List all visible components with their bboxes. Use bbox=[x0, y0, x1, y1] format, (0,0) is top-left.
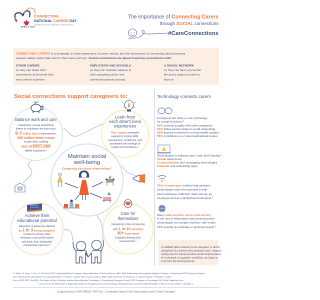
text: social media stats bbox=[157, 116, 219, 138]
header title bbox=[128, 14, 219, 37]
logo: CONNECTING bbox=[34, 14, 59, 18]
column: other carers: each other's expertise. bbox=[16, 78, 46, 82]
text: social media stats: 6 bbox=[183, 121, 184, 123]
circle: achieve educational potential: educational potential bbox=[17, 218, 57, 223]
circle: achieve educational potential: Achieve their bbox=[25, 213, 50, 218]
text: balance technology: Calendar and scheduling apps bbox=[157, 164, 198, 168]
text: assistive technologies: 76% of employees believe that assistive bbox=[157, 184, 211, 188]
text: social media stats: 65% connect socially with other caregivers bbox=[157, 124, 213, 128]
circle: learn from lived experiences: caregivers' coping skills, bbox=[111, 134, 139, 138]
circle: balance work and care: 256 million fewer hours bbox=[17, 136, 55, 140]
figure: two people holding hands bbox=[73, 240, 103, 263]
text: older workers: 9 bbox=[215, 226, 216, 228]
circle: learn from lived experiences bbox=[102, 110, 148, 158]
panel: CARER note: caring role for someone who needs help because bbox=[161, 252, 222, 256]
icon: lightbulb bbox=[122, 98, 136, 112]
text: older workers bbox=[157, 213, 216, 229]
panel: campaign intro bbox=[13, 48, 219, 85]
references: Learn more on the NCW 2023. Is Supporting Caregivers through Research and Technology. http://agewell-nce.ca/archives/2023 Read More in Research and Caregiver Challenge 2. bbox=[39, 282, 194, 286]
circle: maintain social well-being: Maintain social bbox=[68, 154, 106, 160]
circle: balance work and care: Balance work and care bbox=[15, 117, 58, 122]
heading: technology: Technology connects carers bbox=[157, 94, 212, 99]
circle: balance work and care: 1 bbox=[46, 150, 47, 152]
circle: balance work and care: losses to employers are enormous: bbox=[16, 126, 56, 130]
column: a social network: lean on. bbox=[164, 78, 175, 82]
column: other carers: so they can share their bbox=[16, 68, 46, 72]
circle: maintain social well-being: well-being bbox=[73, 160, 100, 166]
text: older workers: technologies as younger workers, with nearly bbox=[157, 220, 216, 224]
circle: achieve educational potential: and lower than anticipated bbox=[22, 239, 53, 243]
divider bbox=[13, 286, 219, 288]
circle: care for themselves: Care for bbox=[121, 211, 136, 216]
text: social media stats: 61% follow social media or social networking bbox=[157, 127, 216, 131]
text: balance technology bbox=[157, 154, 222, 168]
header title: The importance of Connecting Carers bbox=[128, 14, 219, 20]
figure: left person bbox=[73, 241, 88, 263]
column: a social network: so they can have a personal bbox=[164, 68, 201, 72]
text: social media stats: 53% contributes to or view inspirational stories bbox=[157, 134, 218, 138]
header title: #CareConnections bbox=[168, 31, 218, 37]
circle: balance work and care: Collectively, annual productivity bbox=[18, 123, 55, 127]
column: employers and schools bbox=[90, 64, 132, 82]
column: other carers: experiences and benefit from bbox=[16, 72, 54, 76]
figure: bottom right group bbox=[102, 192, 112, 202]
circle: learn from lived experiences: competence, confidence, and bbox=[108, 138, 142, 142]
text: assistive technologies bbox=[157, 184, 213, 200]
references: Fast, et 1999 2017, Vol. 63(5). The Origins of Care & Families, and the Role of Assistive Technology. 4. Caring Family Caregiver. Growth 2023. Computers in Technology 2022, Work Productivity Care. bbox=[13, 279, 184, 282]
panel: CARER note: of a physical or cognitive condition, an injury or bbox=[161, 256, 218, 260]
icon: piggy bank bbox=[31, 102, 43, 113]
icon: laptop bbox=[157, 145, 171, 153]
figure: right person bbox=[88, 240, 103, 263]
circle: balance work and care: skilled employees. bbox=[25, 150, 46, 152]
text: social media stats: for social/ functions: bbox=[157, 120, 183, 124]
text: assistive technologies: employee and as a family/friend caregiver. bbox=[157, 196, 212, 200]
circle: learn from lived experiences: each other's lived bbox=[109, 119, 142, 124]
header title: through SOCIAL connections bbox=[160, 21, 219, 26]
logo: APRIL 6, 2023 bbox=[21, 26, 36, 28]
circle: achieve educational potential bbox=[11, 203, 63, 255]
circle: achieve educational potential: educational outcomes. bbox=[24, 244, 49, 247]
circle: care for themselves bbox=[103, 204, 153, 254]
text: balance technology: Communication and messaging technologies bbox=[157, 160, 218, 164]
circle: learn from lived experiences: 2 bbox=[138, 146, 139, 148]
column: a social network: life and a support system to bbox=[164, 72, 200, 76]
text: older workers: Many older workers are as well-versed bbox=[157, 213, 211, 217]
references: Social Determinants and Systems in Caregiving Network. 2. Statistics Canada. 2022 Caring Canadians Matter 2023 and Social Connections in Caregiver Program. 3. Harding et al 2023. bbox=[13, 276, 172, 278]
heading: social connections: Social connections support caregivers to: bbox=[14, 94, 128, 100]
text: older workers: in the use of information and communication bbox=[157, 216, 215, 220]
circle: achieve educational potential: resulting in poor performance bbox=[20, 236, 54, 240]
text: assistive technologies: 8 bbox=[212, 197, 213, 199]
spokes bbox=[65, 182, 103, 200]
column: a social network bbox=[164, 64, 201, 82]
text: assistive technologies: their employees fulfil their dual roles as an bbox=[157, 192, 212, 196]
icon: smiley speech line bbox=[128, 29, 169, 38]
references: 1 LeBlanc, S. Jones, J. Price, J. Friel Years 2023 Connecting Memory Caregivers Means Education, & Chronic Disease, 46(1). Work Productivity and Caregiving. Employers Program, in Connecting 2023 Caregiver's Program. bbox=[13, 272, 206, 275]
circle: achieve educational potential: Education is adversely affected bbox=[19, 224, 55, 228]
column: a social network: A SOCIAL NETWORK bbox=[164, 64, 195, 68]
logo: NATIONAL CARERS DAY bbox=[34, 19, 77, 23]
circle: balance work and care: of paid work, totalling bbox=[24, 140, 49, 144]
text: older workers: 70% scoring at moderate or proficient levels. bbox=[157, 225, 215, 229]
circle: care for themselves: personal time. bbox=[119, 240, 136, 243]
logo: INVITATION FOR CARING SUNDAY 2023 bbox=[34, 23, 74, 26]
circle: maintain social well-being: Caregiving can strain relationships. bbox=[62, 166, 111, 170]
circle: learn from lived experiences: Learn from bbox=[115, 114, 135, 120]
circle: care for themselves: Caregiving is less consuming bbox=[111, 222, 145, 226]
circle: maintain social well-being bbox=[51, 144, 123, 216]
circle: care for themselves: Hopefully limiting their bbox=[115, 236, 141, 240]
circle: care for themselves: with 1 in 10 spending bbox=[113, 226, 143, 231]
circle: learn from lived experiences: burden and loneliness. bbox=[111, 146, 138, 149]
circle: learn from lived experiences: experiences bbox=[114, 124, 136, 128]
circle: care for themselves: 5 bbox=[136, 240, 137, 242]
figure: central woman in red dress bbox=[79, 170, 89, 200]
column: other carers: OTHER CARERS bbox=[16, 64, 40, 68]
icon: heart badge bbox=[124, 200, 132, 208]
panel: CARER note: a chronic life-limiting illness. bbox=[161, 259, 195, 263]
circle: balance work and care: 9.7 million days of absenteeism, bbox=[15, 130, 57, 136]
panel: technology connects carers bbox=[157, 94, 222, 265]
divider bbox=[154, 88, 156, 266]
panel: CARER note: caregiver) is a person who provides care, support, bbox=[161, 248, 222, 252]
column: employers and schools: so they can maintain balance in bbox=[90, 68, 132, 72]
circle: maintain social well-being: 3 bbox=[111, 168, 112, 170]
circle: achieve educational potential: by 1 in 3 young caregivers bbox=[19, 228, 56, 232]
icon: speech bubbles bbox=[158, 108, 172, 114]
panel: CARER note: A CARER (also referred to as caregiver or family bbox=[161, 245, 221, 249]
text: balance technology: Technologies to balance care, work and learning: bbox=[157, 154, 221, 158]
column: employers and schools: career/educational pursuits. bbox=[90, 78, 126, 82]
figure: top right group bbox=[106, 176, 114, 186]
text: social media stats: Caregivers are likely to use technology bbox=[157, 116, 208, 120]
icon: wifi bbox=[158, 176, 166, 182]
circle: care for themselves: 30+ hours/week bbox=[117, 230, 140, 236]
figure: top left carer bbox=[58, 173, 62, 187]
icon: globe bbox=[158, 205, 166, 212]
circle: balance work and care bbox=[10, 108, 62, 160]
panel: CARER note bbox=[158, 240, 222, 265]
circle: balance work and care: loss of $557,698 bbox=[21, 144, 51, 148]
text: social media stats: 59% access emotional or mental health support bbox=[157, 130, 219, 134]
text: balance technology: 7 bbox=[221, 155, 222, 157]
column: other carers bbox=[16, 64, 54, 82]
circle: care for themselves: themselves bbox=[118, 216, 138, 221]
icon: megaphone bbox=[133, 174, 145, 183]
circle: achieve educational potential: 4 bbox=[49, 244, 50, 246]
icon: house bbox=[15, 183, 25, 192]
text: assistive technologies: technologies have the potential to help bbox=[157, 188, 208, 192]
panel: campaign intro: CONNECTING CARERS is a campaign to raise awareness of carers needs, and the importance of connecting and accessing bbox=[16, 52, 185, 56]
column: employers and schools: EMPLOYERS AND SCHOOLS bbox=[90, 64, 131, 68]
logo bbox=[15, 8, 77, 28]
circle: learn from lived experiences: decreased their feelings of bbox=[110, 142, 140, 146]
supported by line: Supported by CAA/ PMSA, PSA Inc., Canadian Home Care Association and Carers Canada bbox=[57, 290, 175, 294]
text: balance technology: Virtual classrooms bbox=[157, 157, 182, 161]
connecting lines bbox=[23, 124, 138, 242]
circle: learn from lived experiences: Peer support increased bbox=[111, 130, 140, 134]
references bbox=[13, 272, 206, 286]
panel: campaign intro: support earlier rather than later in their care journeys. Social connections are about fostering connections with: bbox=[16, 56, 172, 60]
icon: books bbox=[27, 204, 42, 212]
column: employers and schools: their caregiving duties and bbox=[90, 72, 125, 76]
figure: bottom left group bbox=[63, 200, 80, 208]
circle: achieve educational potential: enrolled in school, often bbox=[23, 232, 51, 236]
